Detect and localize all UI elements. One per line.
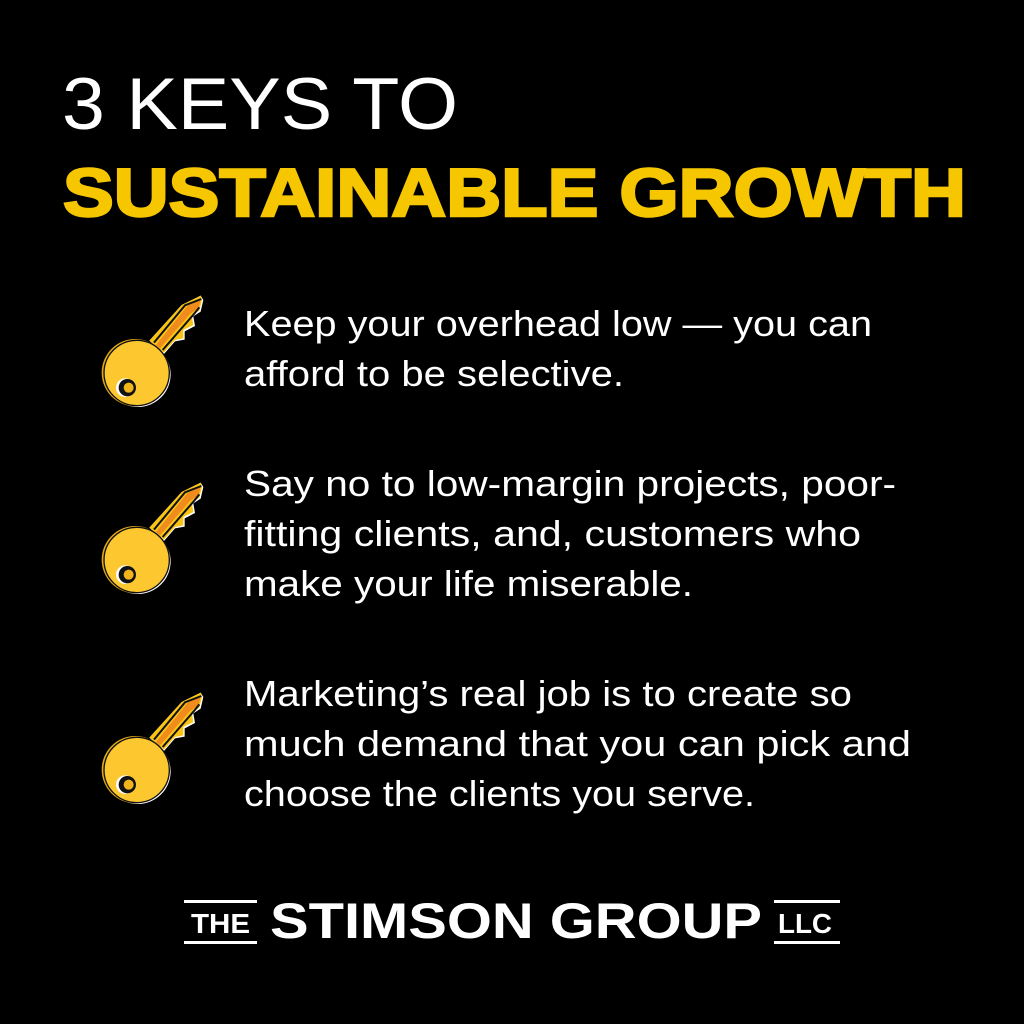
text: marketing [244, 673, 911, 814]
text: say no: make your life miserable. [244, 563, 693, 604]
logo [184, 893, 840, 949]
text: overhead: Keep your overhead low — you can [244, 303, 872, 344]
text: marketing: choose the clients you serve. [244, 773, 755, 814]
icon: key 3 [102, 693, 203, 804]
key point 1 [102, 296, 872, 407]
text: say no [244, 463, 896, 604]
icon: key 2 [102, 483, 203, 594]
logo: LLC: LLC [778, 908, 832, 939]
text: overhead [244, 303, 872, 394]
icon: key 1 [102, 296, 203, 407]
text: say no: Say no to low-margin projects, poor- [244, 463, 896, 504]
logo: STIMSON GROUP: STIMSON GROUP [270, 893, 762, 949]
text: say no: fitting clients, and, customers who [244, 513, 861, 554]
text: marketing: much demand that you can pick and [244, 723, 911, 764]
title line 2: SUSTAINABLE GROWTH [63, 155, 966, 231]
text: marketing: Marketing’s real job is to create so [244, 673, 852, 714]
logo: THE: THE [191, 908, 250, 939]
text: overhead: afford to be selective. [244, 353, 624, 394]
key point 2 [102, 463, 896, 604]
title [62, 64, 966, 231]
title line 1: 3 KEYS TO [62, 64, 458, 145]
key point 3 [102, 673, 911, 814]
